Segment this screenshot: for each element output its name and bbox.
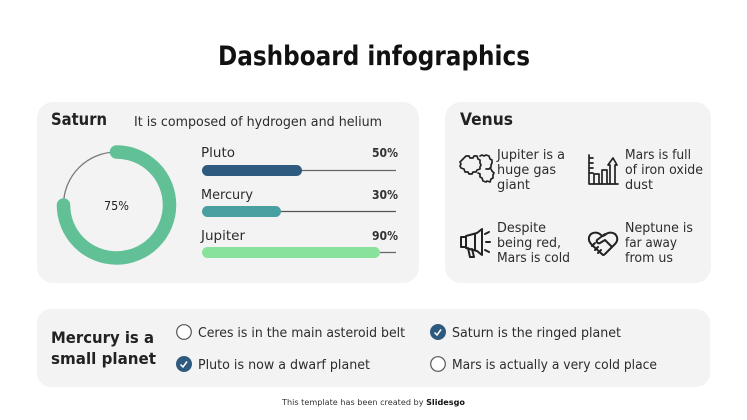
text: Neptune: Neptune is	[625, 221, 693, 236]
Venus heading: Venus	[460, 110, 513, 130]
panel: Venus: far away	[625, 236, 677, 251]
panel: Venus: huge gas	[497, 163, 556, 178]
panel: Venus: being red,	[497, 236, 561, 251]
checklist: Saturn: Saturn is the ringed planet	[452, 326, 621, 341]
bar: Pluto: Pluto	[201, 146, 235, 161]
Saturn description: It is composed of hydrogen and helium	[134, 115, 382, 130]
bar: Pluto: 50%	[372, 145, 398, 160]
footer credit: This template has been created by Slidesgo	[281, 398, 465, 407]
panel: Venus: from us	[625, 251, 673, 266]
bar: Jupiter	[200, 228, 398, 258]
panel: Saturn	[37, 102, 419, 283]
donut chart 75%	[64, 152, 170, 258]
panel: Venus: dust	[625, 178, 653, 193]
icon: bar chart with arrow	[589, 155, 618, 184]
bar: Jupiter: Jupiter	[200, 229, 246, 244]
icon: megaphone	[461, 229, 490, 257]
panel: Venus: giant	[497, 178, 530, 193]
bar: Mercury: 30%	[372, 187, 398, 202]
bar: Pluto	[201, 145, 398, 176]
text: Jupiter: Jupiter is a	[496, 148, 565, 163]
bar: Mercury: Mercury	[201, 188, 253, 203]
panel: Mercury checklist	[37, 309, 710, 387]
checklist: Ceres: Ceres is in the main asteroid belt	[198, 326, 405, 341]
Saturn heading: Saturn	[51, 110, 107, 130]
checklist: Mars: Mars is actually a very cold place	[452, 358, 657, 373]
title: Dashboard infographics	[218, 41, 530, 72]
text: Mars: Mars is full	[625, 148, 691, 163]
donut chart 75%: 75%	[104, 198, 129, 213]
bar: Mercury	[201, 187, 398, 217]
icon: handshake heart	[589, 233, 617, 255]
panel: Venus: of iron oxide	[625, 163, 703, 178]
bar: Jupiter: 90%	[372, 228, 398, 243]
panel: Mercury checklist: small planet	[51, 349, 156, 368]
panel: Venus: Mars is cold	[497, 251, 570, 266]
panel: Venus	[445, 102, 711, 283]
text: Despite: Despite	[497, 221, 546, 236]
checklist: Pluto: Pluto is now a dwarf planet	[198, 358, 370, 373]
icon: puzzle cluster	[460, 155, 494, 182]
Mercury heading: Mercury is a	[51, 328, 154, 347]
